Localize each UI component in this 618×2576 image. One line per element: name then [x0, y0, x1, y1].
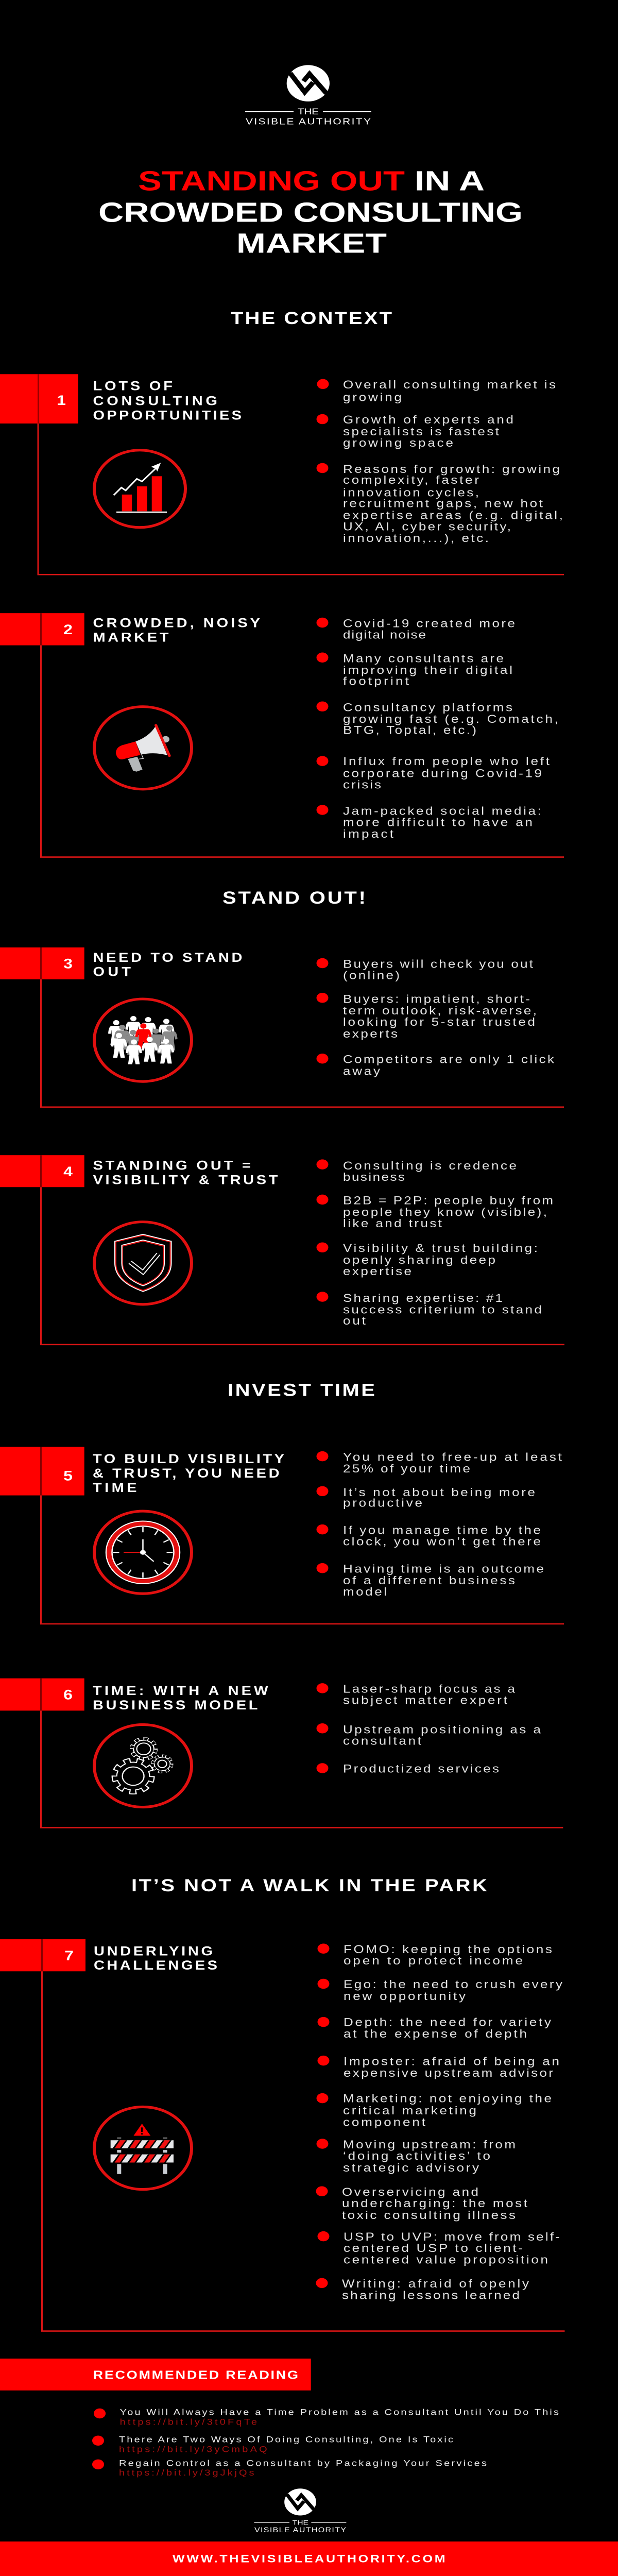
bullet list: section 2: Consultancy platforms	[343, 701, 512, 714]
bullet list: section 2: impact	[343, 828, 393, 840]
section 5 heading: TO BUILD VISIBILITY	[93, 1452, 284, 1466]
bullet list: section 1: recruitment gaps, new hot	[343, 498, 543, 510]
bullet list: section 2: Influx from people who left	[343, 755, 550, 768]
bullet list: section 7: Imposter: afraid of being an	[344, 2055, 559, 2068]
bullet list: section 7: sharing lessons learned	[342, 2289, 520, 2302]
reading link 2: There Are Two Ways Of Doing Consulting, One Is Toxic	[119, 2434, 453, 2444]
number 7: 7	[64, 1948, 74, 1963]
bullet list: section 7: Marketing: not enjoying the	[343, 2092, 552, 2105]
bullet list: section 7: FOMO: keeping the options	[344, 1943, 552, 1956]
bullet list: section 1: expertise areas (e.g. digital,	[343, 509, 563, 522]
bullet list: section 7: new opportunity	[344, 1990, 466, 2003]
bullet list: section 6	[316, 1683, 541, 1775]
title: MARKET	[236, 227, 387, 259]
section 5 heading: TIME	[93, 1481, 137, 1495]
bullet list: section 2: digital noise	[343, 629, 426, 641]
reading link 2	[92, 2434, 453, 2454]
bullet list: section 2: corporate during Covid-19	[343, 767, 542, 780]
bullet list: section 7: Writing: afraid of openly	[342, 2278, 529, 2291]
number 1: 1	[57, 393, 66, 408]
bullet list: section 4	[316, 1159, 553, 1327]
bullet list: section 1: specialists is fastest	[343, 426, 499, 438]
heading: the context: THE CONTEXT	[231, 308, 392, 328]
bullet list: section 7: centered value proposition	[344, 2254, 548, 2266]
bullet list: section 4: people they know (visible),	[343, 1206, 547, 1219]
footer bar with website	[0, 2541, 618, 2576]
bullet list: section 2: BTG, Toptal, etc.)	[343, 724, 476, 737]
number 6: 6	[63, 1687, 73, 1703]
panel: recommended reading	[0, 2359, 559, 2478]
icon: crowd of people	[94, 999, 192, 1081]
bullet list: section 4: openly sharing deep	[343, 1254, 495, 1266]
bullet list: section 7: Overservicing and	[342, 2186, 478, 2198]
bullet list: section 1: growing space	[343, 437, 453, 449]
bullet list: section 5: clock, you won’t get there	[343, 1535, 541, 1548]
bullet list: section 5: You need to free-up at least	[343, 1451, 562, 1464]
bullet list: section 6: Upstream positioning as a	[343, 1723, 541, 1736]
bullet list: section 7: Ego: the need to crush every	[344, 1978, 562, 1991]
bullet list: section 4: out	[343, 1315, 366, 1327]
bullet list: section 2: Covid-19 created more	[343, 617, 515, 630]
bullet list: section 4: like and trust	[343, 1217, 442, 1230]
footer logo mark	[284, 2488, 316, 2515]
bullet list: section 5: Having time is an outcome	[343, 1563, 544, 1575]
bullet list: section 1: complexity, faster	[343, 474, 479, 486]
bullet list: section 6: subject matter expert	[343, 1694, 507, 1707]
icon: gears	[94, 1724, 192, 1807]
number 3: 3	[63, 956, 73, 972]
section 7 heading: CHALLENGES	[94, 1958, 217, 1972]
reading link 1: You Will Always Have a Time Problem as a Consultant Until You Do This	[120, 2407, 559, 2417]
bullet list: section 3: (online)	[343, 969, 400, 982]
reading link 1	[94, 2407, 559, 2427]
bullet list: section 3: experts	[343, 1028, 398, 1040]
section 3 heading	[93, 951, 243, 979]
section 1 heading	[93, 379, 242, 422]
section 2 heading: CROWDED, NOISY	[93, 616, 260, 630]
bullet list: section 1: Reasons for growth: growing	[343, 463, 560, 476]
bullet list: section 7: toxic consulting illness	[342, 2209, 516, 2222]
bullet list: section 4: Visibility & trust building:	[343, 1242, 538, 1255]
bullet list: section 2: Jam-packed social media:	[343, 805, 541, 818]
bullet list: section 2: more difficult to have an	[343, 816, 533, 829]
bullet list: section 7: expensive upstream advisor	[344, 2067, 553, 2080]
bullet list: section 3: away	[343, 1065, 380, 1078]
title: IN A	[415, 165, 485, 196]
bullet list: section 7: strategic advisory	[343, 2162, 479, 2174]
number 4: 4	[63, 1164, 73, 1179]
icon: road barrier with warning	[94, 2107, 192, 2190]
section 6 heading: TIME: WITH A NEW	[93, 1684, 268, 1698]
bullet list: section 3: Buyers: impatient, short-	[343, 993, 530, 1006]
number 5: 5	[63, 1468, 73, 1484]
section 4 heading	[93, 1159, 278, 1187]
logo: footer: THE	[293, 2519, 308, 2526]
title	[98, 165, 523, 259]
section 6 heading	[93, 1684, 268, 1712]
panel: section 7 underlying challenges	[0, 1939, 564, 2331]
logo: footer	[254, 2488, 346, 2534]
section 7 heading	[94, 1944, 217, 1972]
bullet list: section 7	[316, 1943, 562, 2302]
section 3 heading: OUT	[93, 965, 131, 979]
bullet list: section 1	[316, 379, 563, 545]
bullet list: section 7: Moving upstream: from	[343, 2139, 516, 2151]
bullet list: section 5	[316, 1451, 562, 1599]
logo: header: THE	[298, 106, 319, 116]
bullet list: section 5: If you manage time by the	[343, 1524, 541, 1537]
bullet list: section 3: Competitors are only 1 click	[343, 1053, 555, 1066]
panel: section 4 standing out = visibility and trust	[0, 1155, 564, 1345]
section 1 heading: CONSULTING	[93, 394, 217, 408]
bullet list: section 2: improving their digital	[343, 664, 512, 677]
bullet list: section 1: UX, AI, cyber security,	[343, 520, 511, 533]
icon: megaphone	[94, 707, 192, 789]
bullet list: section 5: productive	[343, 1497, 422, 1510]
bullet list: section 4: Sharing expertise: #1	[343, 1292, 503, 1304]
bullet list: section 6: Laser-sharp focus as a	[343, 1683, 516, 1696]
section 4 heading: VISIBILITY & TRUST	[93, 1173, 278, 1187]
bullet list: section 3: Buyers will check you out	[343, 958, 533, 971]
heading: stand out: STAND OUT!	[222, 888, 366, 908]
reading link 1: https://bit.ly/3t0FqTe	[120, 2417, 257, 2427]
bullet list: section 4: Consulting is credence	[343, 1160, 517, 1172]
bullet list: section 1: Overall consulting market is	[343, 379, 556, 392]
logo: header	[245, 65, 371, 127]
reading link 2: https://bit.ly/3yCmbAQ	[119, 2444, 267, 2454]
bullet list: section 2: footprint	[343, 675, 409, 688]
recommended reading banner: RECOMMENDED READING	[93, 2368, 298, 2382]
bullet list: section 3: looking for 5-star trusted	[343, 1016, 535, 1029]
bullet list: section 4: expertise	[343, 1265, 411, 1278]
title: CROWDED CONSULTING	[98, 196, 523, 228]
bullet list: section 5: model	[343, 1586, 387, 1599]
bullet list: section 7: ‘doing activities’ to	[343, 2150, 490, 2163]
section 1 heading: LOTS OF	[93, 379, 173, 393]
heading: it's not a walk in the park: IT’S NOT A WALK IN THE PARK	[131, 1875, 487, 1895]
reading link 3	[92, 2458, 487, 2478]
bullet list: section 7: open to protect income	[344, 1955, 523, 1968]
panel: section 1 lots of consulting opportunities	[0, 374, 564, 574]
panel: section 2 crowded, noisy market	[0, 613, 564, 857]
bullet list: section 7: USP to UVP: move from self-	[344, 2231, 560, 2243]
bullet list: section 4: success criterium to stand	[343, 1303, 542, 1316]
heading: invest time: INVEST TIME	[228, 1380, 375, 1400]
section 2 heading: MARKET	[93, 630, 169, 645]
icon: shield with check	[94, 1222, 192, 1304]
number 2: 2	[63, 622, 73, 637]
title: STANDING OUT	[138, 165, 405, 196]
bullet list: section 7: Depth: the need for variety	[344, 2016, 551, 2029]
section 6 heading: BUSINESS MODEL	[93, 1698, 258, 1712]
bullet list: section 6: consultant	[343, 1735, 421, 1748]
footer bar with website: WWW.THEVISIBLEAUTHORITY.COM	[173, 2553, 445, 2565]
section 7 heading: UNDERLYING	[94, 1944, 213, 1958]
bullet list: section 1: growing	[343, 391, 402, 404]
panel: section 5 to build visibility and trust you need time	[0, 1447, 564, 1624]
bullet list: section 4: business	[343, 1171, 405, 1184]
bullet list: section 2	[316, 617, 558, 840]
logo: footer: VISIBLE AUTHORITY	[254, 2527, 346, 2534]
bullet list: section 1: Growth of experts and	[343, 414, 513, 427]
reading link 3: Regain Control as a Consultant by Packaging Your Services	[119, 2458, 487, 2468]
bullet list: section 7: centered USP to client-	[344, 2242, 523, 2255]
bullet list: section 3	[316, 958, 555, 1078]
bullet list: section 7: at the expense of depth	[344, 2028, 527, 2041]
logo mark	[287, 65, 330, 101]
bullet list: section 5: 25% of your time	[343, 1463, 470, 1476]
bullet list: section 7: undercharging: the most	[342, 2197, 527, 2210]
bullet list: section 7: critical marketing	[343, 2105, 476, 2117]
section 5 heading: & TRUST, YOU NEED	[93, 1466, 280, 1480]
logo: header: VISIBLE AUTHORITY	[246, 116, 371, 127]
panel: section 3 need to stand out	[0, 947, 564, 1107]
section 2 heading	[93, 616, 260, 645]
bullet list: section 1: innovation cycles,	[343, 486, 479, 499]
bullet list: section 3: term outlook, risk-averse,	[343, 1005, 537, 1018]
bullet list: section 2: crisis	[343, 778, 381, 791]
section 5 heading	[93, 1452, 284, 1495]
recommended reading banner	[0, 2359, 311, 2391]
bullet list: section 5: of a different business	[343, 1574, 515, 1587]
bullet list: section 6: Productized services	[343, 1762, 499, 1775]
section 1 heading: OPPORTUNITIES	[93, 408, 242, 422]
icon: growth chart	[94, 450, 185, 528]
reading link 3: https://bit.ly/3gJkjQs	[119, 2468, 254, 2478]
bullet list: section 2: growing fast (e.g. Comatch,	[343, 713, 558, 725]
bullet list: section 4: B2B = P2P: people buy from	[343, 1194, 553, 1207]
section 3 heading: NEED TO STAND	[93, 951, 243, 964]
bullet list: section 2: Many consultants are	[343, 652, 504, 665]
icon: clock	[94, 1511, 192, 1594]
section 4 heading: STANDING OUT =	[93, 1159, 251, 1173]
bullet list: section 1: innovation,...), etc.	[343, 532, 489, 545]
bullet list: section 5: It’s not about being more	[343, 1486, 535, 1499]
panel: section 6 time with a new business model	[0, 1679, 563, 1827]
bullet list: section 7: component	[343, 2116, 425, 2129]
